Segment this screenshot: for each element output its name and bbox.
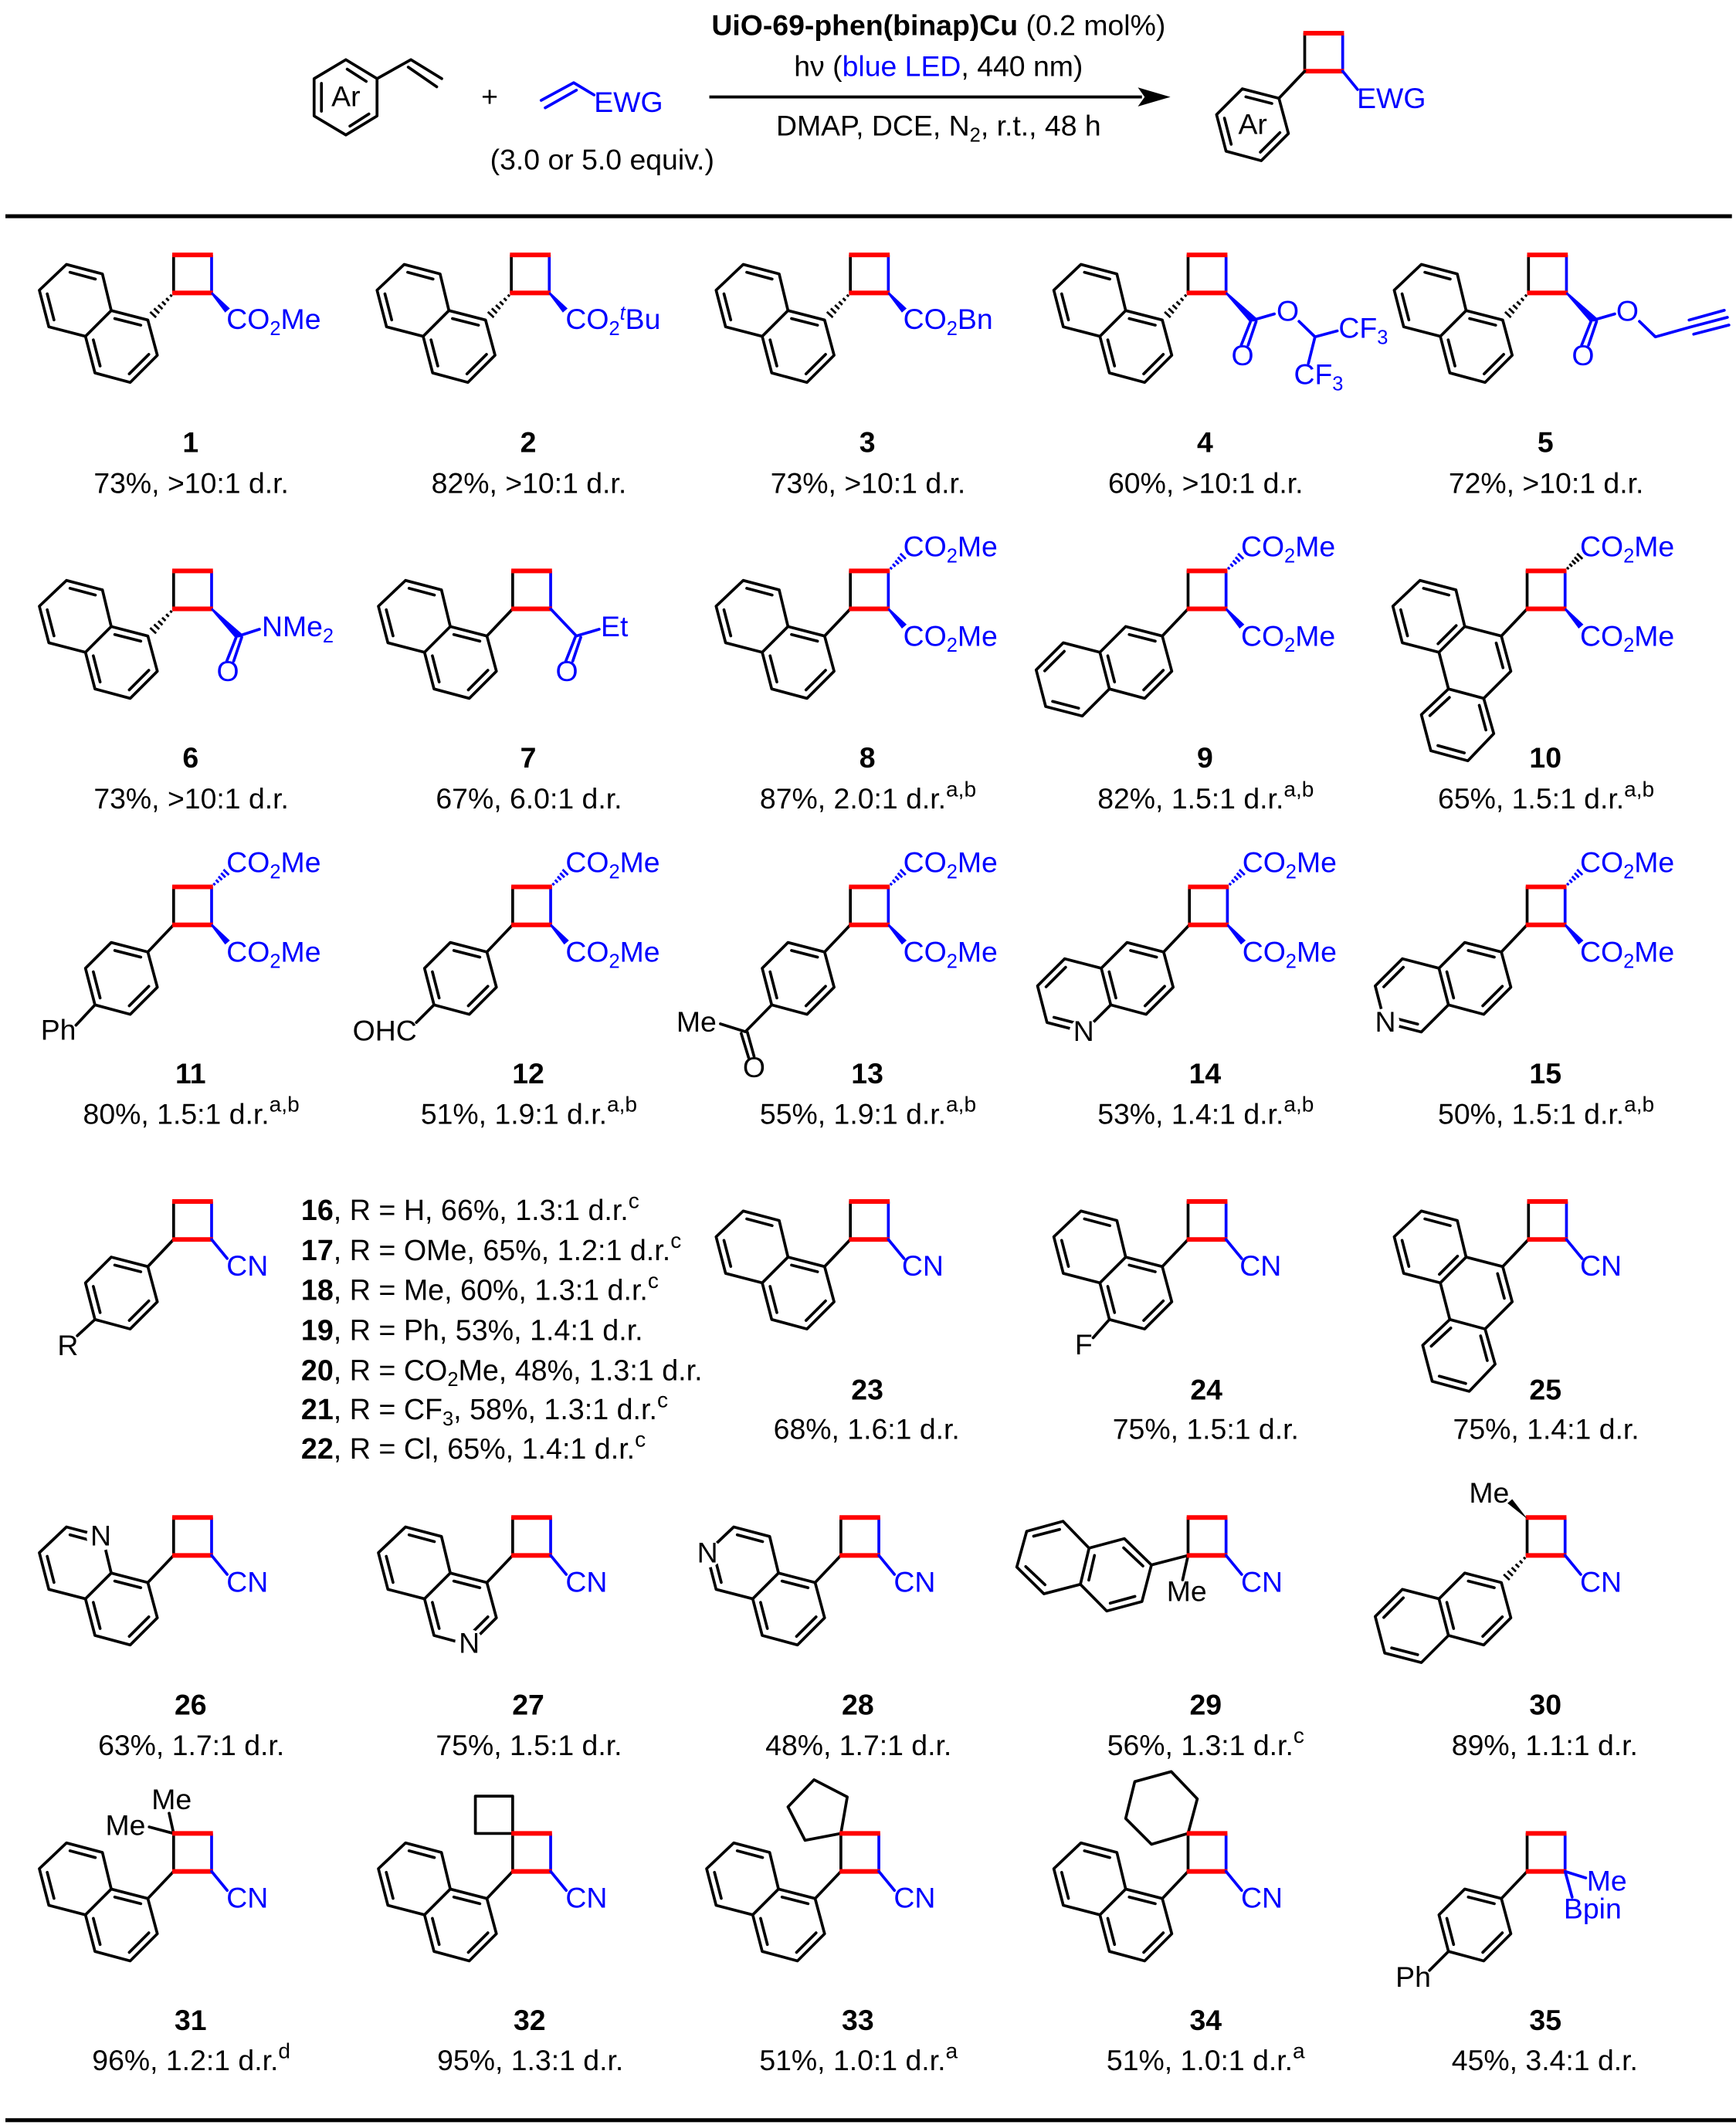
structure 24: CN	[1239, 1249, 1281, 1282]
structure 31: Me	[151, 1783, 192, 1815]
top divider	[5, 214, 1732, 219]
compound 32	[378, 1796, 623, 2076]
number 26: 26	[175, 1689, 207, 1721]
number 30: 30	[1529, 1689, 1561, 1721]
structure 14: Me	[1297, 936, 1337, 968]
structure 24	[1054, 1201, 1281, 1361]
structure 15: N	[1375, 1005, 1396, 1038]
structure 9: Me	[1295, 619, 1335, 652]
structure 14: Me	[1297, 846, 1337, 879]
compound 25	[1394, 1201, 1639, 1445]
entry 18: 18, R = Me, 60%, 1.3:1 d.r.	[301, 1274, 648, 1307]
structure 8: Me	[958, 530, 998, 562]
structure 11: Me	[281, 846, 321, 879]
structure 10: CO	[1580, 530, 1623, 562]
yield 12: 51%, 1.9:1 d.r.	[421, 1097, 607, 1130]
entry 21: 21, R = CF	[301, 1393, 442, 1425]
structure 11	[41, 846, 321, 1046]
number 23: 23	[851, 1373, 883, 1405]
structure 12: OHC	[353, 1014, 417, 1046]
yield 31: 96%, 1.2:1 d.r.	[92, 2044, 278, 2076]
structure 23	[716, 1201, 944, 1329]
yield 32: 95%, 1.3:1 d.r.	[437, 2044, 623, 2076]
number 33: 33	[842, 2004, 874, 2036]
compound 35	[1395, 1833, 1638, 2076]
yield 15: 50%, 1.5:1 d.r.	[1438, 1097, 1624, 1130]
compound 28	[693, 1517, 951, 1761]
structure 2: Bu	[626, 303, 660, 335]
plus sign: +	[481, 80, 498, 113]
yield 8: a,b	[946, 777, 976, 801]
compound 9	[1036, 530, 1335, 815]
product general structure: EWG	[1357, 82, 1426, 114]
entry 21: , 58%, 1.3:1 d.r.	[453, 1393, 657, 1425]
structure 33: CN	[893, 1881, 935, 1913]
number 2: 2	[520, 426, 536, 459]
yield 9: a,b	[1283, 777, 1314, 801]
number 35: 35	[1529, 2004, 1561, 2036]
compound 31	[39, 1783, 290, 2076]
structure 9: 2	[1284, 545, 1295, 567]
structure 28	[693, 1517, 935, 1645]
structure 4	[1054, 255, 1388, 395]
structure 2: CO	[565, 303, 609, 335]
compound 12	[353, 846, 660, 1130]
number 10: 10	[1529, 741, 1561, 774]
structure 6: O	[217, 655, 239, 687]
yield 26: 63%, 1.7:1 d.r.	[98, 1729, 284, 1761]
structure 2: t	[620, 303, 626, 324]
entry 21: 3	[442, 1408, 453, 1430]
yield 13: a,b	[946, 1093, 976, 1117]
structure 10: 2	[1623, 635, 1634, 656]
structure 5: O	[1572, 339, 1594, 371]
compounds 16-22 general structure: CN	[226, 1249, 268, 1282]
product general structure: Ar	[1238, 107, 1267, 140]
structure 31: CN	[226, 1881, 268, 1913]
structure 15	[1372, 846, 1674, 1038]
structure 12: CO	[565, 846, 609, 879]
structure 29	[1017, 1517, 1283, 1611]
structure 5: O	[1616, 295, 1639, 327]
compound 14	[1038, 846, 1337, 1130]
entry 20: 20, R = CO	[301, 1354, 447, 1386]
entry 16: 16, R = H, 66%, 1.3:1 d.r.	[301, 1194, 629, 1226]
structure 1	[39, 255, 321, 382]
structure 14: CO	[1243, 846, 1286, 879]
structure 15: Me	[1634, 936, 1674, 968]
structure 13: Me	[676, 1005, 717, 1038]
compound 27	[378, 1517, 622, 1761]
structure 12: 2	[609, 862, 620, 883]
catalyst conditions: UiO-69-phen(binap)Cu (0.2 mol%)	[711, 9, 1165, 42]
yield 30: 89%, 1.1:1 d.r.	[1452, 1729, 1638, 1761]
structure 31: Me	[105, 1809, 145, 1842]
number 14: 14	[1189, 1057, 1221, 1090]
yield 33: a	[945, 2039, 958, 2062]
structure 15: CO	[1580, 846, 1623, 879]
structure 15: Me	[1634, 846, 1674, 879]
number 24: 24	[1190, 1373, 1222, 1405]
structure 4: 3	[1332, 373, 1343, 395]
structure 35: Ph	[1395, 1961, 1431, 1993]
structure 10: Me	[1634, 619, 1674, 652]
entry 16: c	[629, 1188, 639, 1212]
structure 10: Me	[1634, 530, 1674, 562]
structure 1: 2	[270, 318, 281, 340]
structure 3: 2	[947, 318, 958, 340]
compound 11	[41, 846, 321, 1130]
yield 11: a,b	[270, 1093, 300, 1117]
structure 13: CO	[904, 936, 947, 968]
entry 17: c	[670, 1229, 681, 1252]
number 9: 9	[1197, 741, 1213, 774]
structure 14	[1038, 846, 1337, 1047]
structure 27: CN	[565, 1565, 607, 1598]
structure 30: CN	[1580, 1565, 1622, 1598]
yield 27: 75%, 1.5:1 d.r.	[436, 1729, 622, 1761]
yield 13: 55%, 1.9:1 d.r.	[760, 1097, 946, 1130]
alkene with electron-withdrawing group	[541, 83, 663, 118]
entry 22: c	[635, 1427, 646, 1451]
entry 20: 2	[447, 1369, 458, 1391]
structure 28: CN	[893, 1565, 935, 1598]
number 6: 6	[182, 741, 198, 774]
compound 7	[378, 571, 629, 815]
structure 8: CO	[904, 530, 947, 562]
structure 13: 2	[947, 951, 958, 972]
structure 8: CO	[904, 619, 947, 652]
number 3: 3	[860, 426, 876, 459]
number 12: 12	[512, 1057, 544, 1090]
structure 14: 2	[1286, 862, 1297, 883]
yield 10: 65%, 1.5:1 d.r.	[1438, 782, 1624, 815]
structure 23: CN	[902, 1249, 944, 1282]
structure 4: O	[1232, 339, 1254, 371]
structure 10	[1393, 530, 1674, 761]
additive conditions: , r.t., 48 h	[981, 110, 1101, 142]
yield 34: a	[1293, 2039, 1305, 2062]
yield 28: 48%, 1.7:1 d.r.	[765, 1729, 951, 1761]
yield 5: 72%, >10:1 d.r.	[1449, 467, 1643, 500]
yield 15: a,b	[1624, 1093, 1654, 1117]
entry 19: 19, R = Ph, 53%, 1.4:1 d.r.	[301, 1313, 643, 1346]
structure 7: Et	[601, 610, 629, 642]
arrow	[710, 87, 1171, 107]
number 1: 1	[182, 426, 198, 459]
product general structure	[1216, 33, 1426, 161]
structure 4: CF	[1294, 358, 1332, 390]
number 28: 28	[842, 1689, 874, 1721]
yield 10: a,b	[1624, 777, 1654, 801]
structure 13: CO	[904, 846, 947, 879]
compounds 16-22 general structure	[57, 1201, 268, 1361]
structure 29: Me	[1167, 1575, 1207, 1608]
equivalents note: (3.0 or 5.0 equiv.)	[490, 144, 714, 176]
structure 32	[378, 1796, 607, 1961]
compound 6	[39, 571, 334, 815]
structure 25	[1394, 1201, 1622, 1391]
structure 12: 2	[609, 951, 620, 972]
structure 14: 2	[1286, 951, 1297, 972]
entry 22: 22, R = Cl, 65%, 1.4:1 d.r.	[301, 1432, 635, 1465]
yield 29: 56%, 1.3:1 d.r.	[1107, 1729, 1294, 1761]
structure 8: Me	[958, 619, 998, 652]
yield 7: 67%, 6.0:1 d.r.	[436, 782, 622, 815]
structure 7: O	[556, 655, 578, 687]
yield 29: c	[1294, 1723, 1304, 1747]
number 4: 4	[1197, 426, 1213, 459]
bottom divider	[5, 2118, 1736, 2122]
structure 4: CF	[1338, 312, 1377, 344]
structure 27: N	[459, 1626, 480, 1659]
compound 33	[707, 1780, 958, 2076]
yield 23: 68%, 1.6:1 d.r.	[774, 1413, 960, 1445]
number 5: 5	[1538, 426, 1554, 459]
yield 31: d	[278, 2039, 290, 2062]
structure 10: CO	[1580, 619, 1623, 652]
structure 24: F	[1075, 1328, 1093, 1361]
structure 13: 2	[947, 862, 958, 883]
structure 15: 2	[1623, 951, 1634, 972]
number 32: 32	[514, 2004, 546, 2036]
structure 9: Me	[1295, 530, 1335, 562]
structure 11: CO	[226, 936, 270, 968]
yield 2: 82%, >10:1 d.r.	[432, 467, 626, 500]
compounds 16-22 general structure: R	[57, 1329, 78, 1361]
compound 26	[39, 1517, 284, 1761]
structure 8	[716, 530, 998, 698]
compound 29	[1017, 1517, 1304, 1761]
structure 15: CO	[1580, 936, 1623, 968]
yield 9: 82%, 1.5:1 d.r.	[1097, 782, 1283, 815]
yield 4: 60%, >10:1 d.r.	[1108, 467, 1304, 500]
yield 24: 75%, 1.5:1 d.r.	[1113, 1413, 1299, 1445]
number 15: 15	[1529, 1057, 1561, 1090]
additive conditions: 2	[970, 125, 981, 147]
structure 2	[377, 255, 660, 382]
structure 11: 2	[270, 951, 281, 972]
compound 34	[1054, 1771, 1305, 2076]
icon: aryl styrene	[314, 59, 442, 135]
structure 28: N	[697, 1537, 718, 1569]
entry 18: c	[648, 1269, 659, 1293]
number 8: 8	[860, 741, 876, 774]
yield 6: 73%, >10:1 d.r.	[93, 782, 289, 815]
structure 3: CO	[904, 303, 947, 335]
number 11: 11	[175, 1057, 206, 1090]
alkene with electron-withdrawing group: EWG	[594, 86, 663, 118]
structure 3	[716, 255, 993, 382]
icon: aryl styrene: Ar	[331, 80, 361, 112]
compound 2	[377, 255, 660, 500]
number 7: 7	[520, 741, 536, 774]
structure 4: O	[1277, 295, 1299, 327]
structure 8: 2	[947, 635, 958, 656]
structure 11: 2	[270, 862, 281, 883]
yield 34: 51%, 1.0:1 d.r.	[1107, 2044, 1293, 2076]
number 29: 29	[1190, 1689, 1222, 1721]
yield 33: 51%, 1.0:1 d.r.	[759, 2044, 945, 2076]
structure 4: 3	[1377, 327, 1388, 349]
structure 13: Me	[958, 846, 998, 879]
yield 14: a,b	[1283, 1093, 1314, 1117]
structure 14: N	[1073, 1015, 1094, 1047]
structure 11: CO	[226, 846, 270, 879]
structure 34: CN	[1241, 1881, 1283, 1913]
yield 1: 73%, >10:1 d.r.	[93, 467, 289, 500]
compound 30	[1375, 1476, 1638, 1761]
structure 30	[1375, 1476, 1622, 1662]
number 27: 27	[512, 1689, 544, 1721]
compound 10	[1393, 530, 1674, 815]
yield 14: 53%, 1.4:1 d.r.	[1097, 1097, 1283, 1130]
yield 8: 87%, 2.0:1 d.r.	[760, 782, 946, 815]
yield 25: 75%, 1.4:1 d.r.	[1453, 1413, 1639, 1445]
structure 12: CO	[565, 936, 609, 968]
structure 9: 2	[1284, 635, 1295, 656]
structure 14: CO	[1243, 936, 1286, 968]
structure 9	[1036, 530, 1335, 716]
structure 7	[378, 571, 629, 698]
structure 6	[39, 571, 334, 698]
compound 8	[716, 530, 998, 815]
yield 11: 80%, 1.5:1 d.r.	[83, 1097, 270, 1130]
structure 5	[1394, 255, 1729, 382]
structure 11: Ph	[41, 1013, 76, 1046]
structure 8: 2	[947, 545, 958, 567]
structure 12	[353, 846, 660, 1046]
yield 12: a,b	[607, 1093, 637, 1117]
number 13: 13	[851, 1057, 883, 1090]
structure 26: CN	[226, 1565, 268, 1598]
number 31: 31	[175, 2004, 207, 2036]
structure 13: Me	[958, 936, 998, 968]
compounds 16-22 list	[301, 1188, 703, 1465]
structure 30: Me	[1469, 1476, 1509, 1509]
structure 33	[707, 1780, 935, 1961]
structure 35: Bpin	[1564, 1893, 1622, 1925]
structure 9: CO	[1241, 530, 1284, 562]
yield 35: 45%, 3.4:1 d.r.	[1452, 2044, 1638, 2076]
compound 15	[1372, 846, 1674, 1130]
entry 20: Me, 48%, 1.3:1 d.r.	[458, 1354, 703, 1386]
compound 24	[1054, 1201, 1299, 1445]
structure 10: 2	[1623, 545, 1634, 567]
compound 3	[716, 255, 993, 500]
structure 2: 2	[609, 318, 620, 340]
structure 1: CO	[226, 303, 270, 335]
compound 5	[1394, 255, 1729, 500]
structure 34	[1054, 1771, 1283, 1961]
structure 35: Me	[1587, 1865, 1627, 1897]
compound 1	[39, 255, 321, 500]
structure 1: Me	[281, 303, 321, 335]
structure 31	[39, 1783, 268, 1961]
structure 35	[1395, 1833, 1627, 1993]
structure 3: Bn	[958, 303, 993, 335]
structure 11: Me	[281, 936, 321, 968]
yield 3: 73%, >10:1 d.r.	[771, 467, 965, 500]
structure 25: CN	[1580, 1249, 1622, 1282]
structure 32: CN	[565, 1881, 607, 1913]
structure 12: Me	[620, 846, 660, 879]
structure 9: CO	[1241, 619, 1284, 652]
structure 29: CN	[1241, 1565, 1283, 1598]
reaction scheme	[314, 9, 1426, 176]
compound 23	[716, 1201, 960, 1445]
number 25: 25	[1529, 1373, 1561, 1405]
structure 13	[676, 846, 998, 1083]
structure 15: 2	[1623, 862, 1634, 883]
structure 26: N	[90, 1520, 111, 1552]
compound 4	[1054, 255, 1388, 500]
additive conditions: DMAP, DCE, N	[776, 110, 970, 142]
structure 6: NMe	[262, 610, 323, 642]
compound 13	[676, 846, 998, 1130]
structure 12: Me	[620, 936, 660, 968]
structure 6: 2	[323, 625, 334, 647]
structure 13: O	[743, 1051, 765, 1083]
number 34: 34	[1190, 2004, 1222, 2036]
entry 21: c	[657, 1388, 668, 1412]
structure 27	[378, 1517, 607, 1659]
structure 26	[39, 1517, 268, 1645]
entry 17: 17, R = OMe, 65%, 1.2:1 d.r.	[301, 1234, 670, 1266]
light conditions: hν (blue LED, 440 nm)	[794, 49, 1083, 82]
